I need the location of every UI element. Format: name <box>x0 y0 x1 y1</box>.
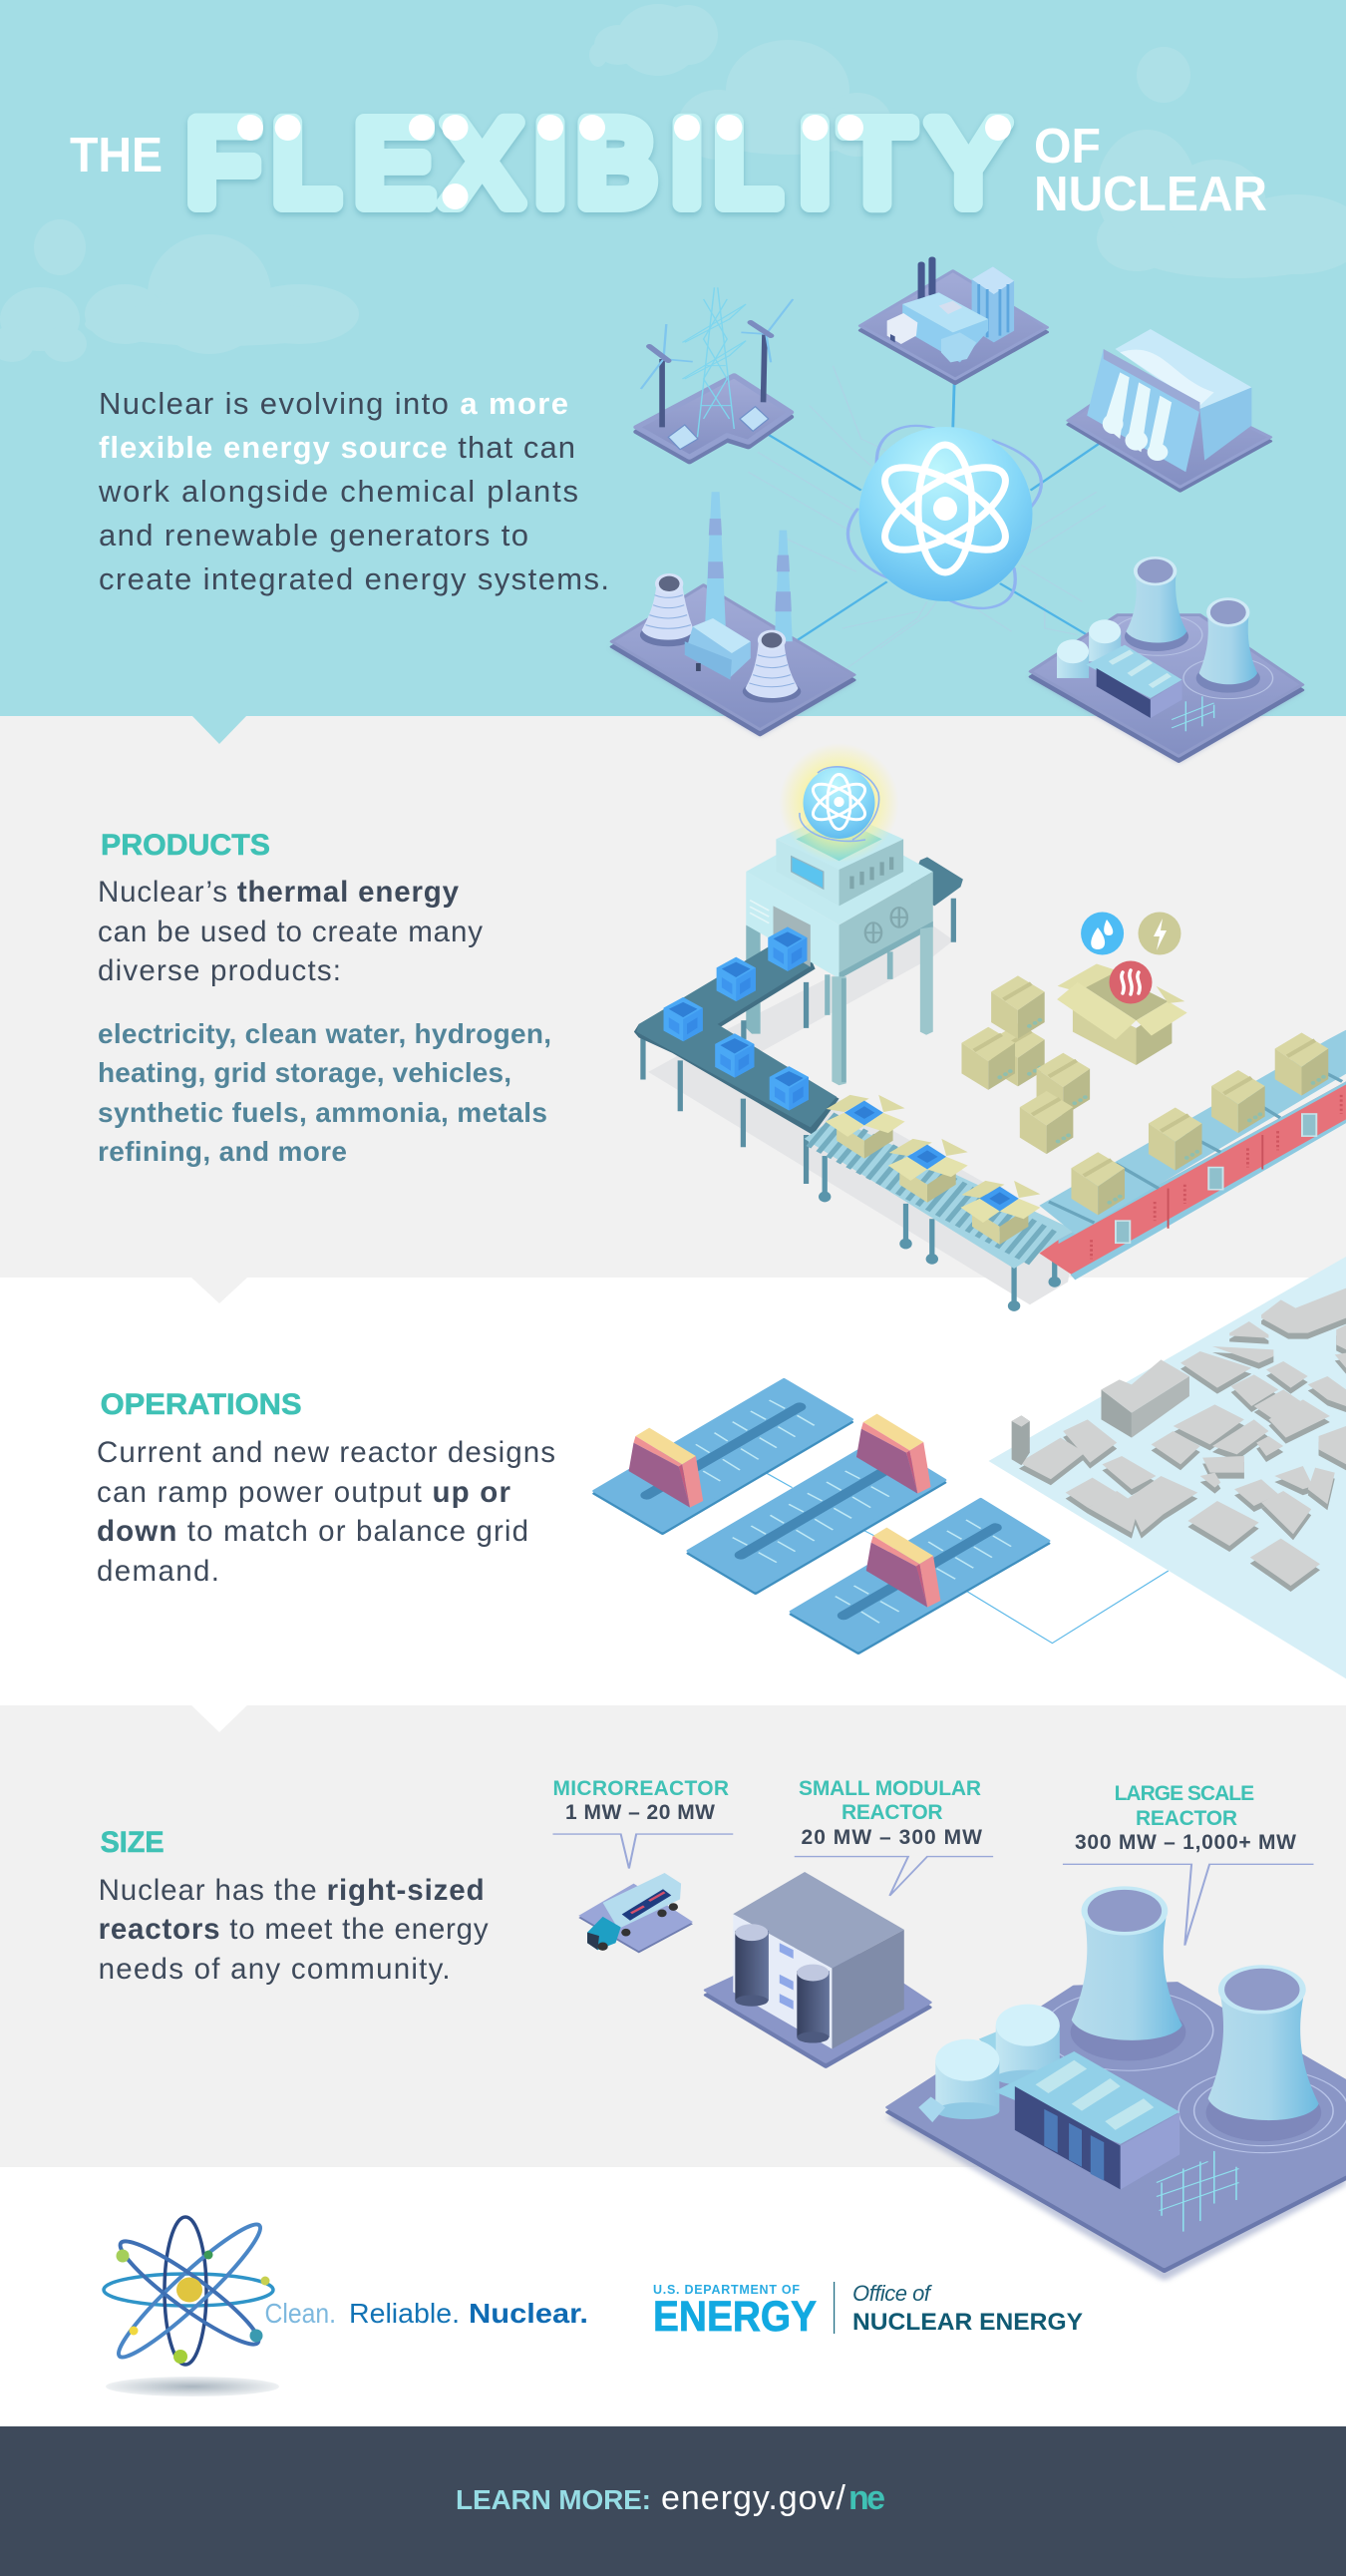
intro text <box>98 386 609 596</box>
clouds <box>0 4 1346 362</box>
open boxes with blue cubes <box>826 1095 1040 1245</box>
footer: energy.gov/ <box>661 2479 846 2517</box>
icon: water <box>1081 912 1124 955</box>
cardboard boxes <box>961 975 1328 1215</box>
circuit traces <box>748 366 1106 668</box>
machine legs rear <box>746 925 893 1034</box>
panel: logos background <box>0 2167 1346 2426</box>
products text <box>98 876 483 987</box>
city buildings <box>1012 1288 1346 1592</box>
intro text: work alongside chemical plants <box>98 474 578 509</box>
icon: small modular reactor <box>706 1872 930 2066</box>
icon: large scale reactor <box>887 1886 1346 2281</box>
illustration: reactor sizes <box>552 1834 1346 2281</box>
slider ticks <box>696 1400 1011 1623</box>
products text: Nuclear’s thermal energy <box>98 876 460 909</box>
illustration: integrated energy hub <box>612 259 1302 763</box>
operations text: down to match or balance grid <box>97 1515 528 1548</box>
connector lines <box>767 1473 1169 1644</box>
logo text: tagline: Nuclear. <box>469 2298 588 2329</box>
heading: size: SIZE <box>101 1826 165 1859</box>
logo text: tagline: Reliable. <box>349 2298 460 2329</box>
orbit arrows <box>847 426 1041 608</box>
products text: diverse products: <box>98 954 341 987</box>
floor shadow <box>648 925 1075 1304</box>
intro text: flexible energy source that can <box>99 430 575 465</box>
title: OF <box>1034 120 1101 174</box>
slider tracks <box>647 1407 995 1616</box>
icon: coal plant tile <box>612 492 854 736</box>
footer <box>0 2426 1346 2576</box>
products list: refining, and more <box>98 1136 347 1167</box>
panel: products background <box>0 715 1346 1278</box>
logo: clean reliable nuclear atom <box>104 2214 279 2396</box>
label: large scale reactor: 300 MW – 1,000+ MW <box>1075 1831 1296 1854</box>
label: microreactor <box>552 1777 729 1824</box>
label: small modular reactor: SMALL MODULAR <box>799 1777 981 1800</box>
operations text: Current and new reactor designs <box>97 1436 555 1469</box>
label: microreactor: MICROREACTOR <box>552 1777 729 1800</box>
icon: hydro dam tile <box>1068 329 1270 491</box>
machine body <box>746 811 933 1085</box>
intro text: and renewable generators to <box>99 518 528 552</box>
label: microreactor: 1 MW – 20 MW <box>565 1801 715 1824</box>
logo text: tagline: Clean. <box>265 2298 336 2329</box>
heading: operations: OPERATIONS <box>101 1388 302 1421</box>
panel: intro background <box>0 0 1346 716</box>
size text: reactors to meet the energy <box>99 1913 489 1946</box>
icon: heat <box>1109 961 1153 1003</box>
intro text: Nuclear is evolving into a more <box>99 386 568 421</box>
operations text <box>97 1436 555 1588</box>
label: large scale reactor: LARGE SCALE <box>1115 1782 1254 1805</box>
label: large scale reactor <box>1075 1782 1296 1854</box>
logo: department of energy: Office of <box>852 2281 933 2306</box>
panel: operations background <box>0 1278 1346 1706</box>
roller conveyor <box>805 1118 1075 1311</box>
rear conveyor <box>908 857 963 942</box>
front conveyor belt <box>634 928 840 1184</box>
label: small modular reactor: REACTOR <box>841 1801 943 1824</box>
city ground <box>989 1257 1346 1678</box>
logo: department of energy: ENERGY <box>653 2293 817 2341</box>
logo: department of energy: U.S. DEPARTMENT OF <box>653 2283 800 2297</box>
size text: needs of any community. <box>99 1953 451 1986</box>
blue cubes on belt <box>664 926 809 1111</box>
icon: electricity <box>1139 912 1180 955</box>
illustration: products assembly line <box>634 811 1346 1311</box>
icon: wind and transmission tile <box>637 287 793 462</box>
connectors <box>767 382 1099 641</box>
large open box <box>1057 964 1187 1065</box>
products list: synthetic fuels, ammonia, metals <box>98 1097 547 1128</box>
label: small modular reactor: 20 MW – 300 MW <box>802 1826 982 1849</box>
slider handles <box>629 1414 940 1608</box>
products text: can be used to create many <box>98 916 483 948</box>
logo: department of energy: NUCLEAR ENERGY <box>852 2309 1083 2336</box>
logo: department of energy <box>653 2281 1083 2341</box>
icon: nuclear plant tile <box>1031 556 1302 763</box>
products list: heating, grid storage, vehicles, <box>98 1057 511 1088</box>
products list <box>98 1018 551 1167</box>
logo text: tagline <box>265 2298 588 2329</box>
title <box>70 98 1267 229</box>
label: small modular reactor <box>799 1777 982 1849</box>
title: THE <box>70 129 163 183</box>
icon: factory tile <box>860 259 1047 384</box>
intro text: create integrated energy systems. <box>99 561 609 596</box>
slider slabs <box>594 1379 1048 1654</box>
callout lines <box>552 1834 1313 1946</box>
products list: electricity, clean water, hydrogen, <box>98 1018 551 1049</box>
footer: ne <box>848 2479 885 2517</box>
label: large scale reactor: REACTOR <box>1136 1807 1237 1830</box>
footer: LEARN MORE: <box>456 2484 651 2515</box>
icon: microreactor truck <box>578 1873 693 1953</box>
panel: size background <box>0 1705 1346 2167</box>
icon: central atom sphere <box>859 427 1033 601</box>
illustration: grid demand sliders and city <box>594 1257 1346 1678</box>
icon: products reactor sphere <box>780 743 899 863</box>
red conveyor <box>1039 1030 1346 1280</box>
operations text: can ramp power output up or <box>97 1476 511 1509</box>
title word: flexibility: FLEXIBILITY <box>186 98 1008 229</box>
title: NUCLEAR <box>1034 168 1267 221</box>
heading: products: PRODUCTS <box>101 829 270 862</box>
size text <box>99 1874 489 1986</box>
operations text: demand. <box>97 1555 219 1588</box>
size text: Nuclear has the right-sized <box>99 1874 485 1907</box>
